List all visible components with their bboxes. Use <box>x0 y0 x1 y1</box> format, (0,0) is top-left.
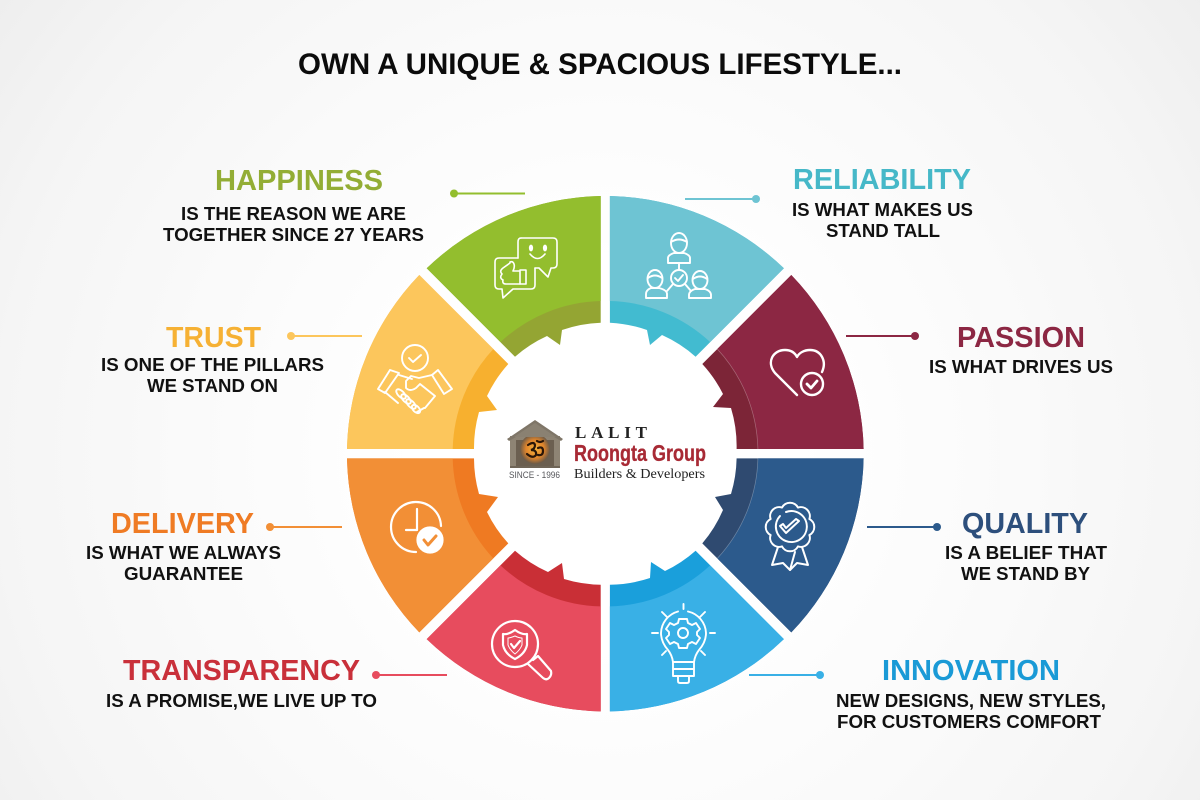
icon: house with om <box>507 420 563 468</box>
callout: quality <box>867 508 1107 584</box>
callout: passion <box>846 322 1113 377</box>
callout: reliability: STAND TALL <box>826 221 940 241</box>
icon: reliability team <box>646 233 711 298</box>
logo name: LALIT <box>575 423 648 442</box>
segment: happiness <box>427 196 601 357</box>
icon: handshake with check <box>378 345 452 415</box>
title: OWN A UNIQUE & SPACIOUS LIFESTYLE... <box>298 48 902 81</box>
since text: SINCE - 1996 <box>509 470 560 481</box>
callout: quality: WE STAND BY <box>961 564 1090 584</box>
callout: trust: WE STAND ON <box>147 376 278 396</box>
logo <box>507 420 706 482</box>
callout: happiness: HAPPINESS <box>215 165 383 197</box>
icon: chat bubbles with smile and thumb <box>495 238 557 298</box>
callout: happiness: IS THE REASON WE ARE <box>181 204 406 224</box>
segment: innovation <box>610 551 784 711</box>
callout: innovation <box>749 655 1106 732</box>
logo group name: Roongta Group <box>574 440 706 466</box>
callout: innovation: NEW DESIGNS, NEW STYLES, <box>836 691 1106 711</box>
callout: transparency: IS A PROMISE,WE LIVE UP TO <box>106 691 377 711</box>
callout: passion: PASSION <box>957 322 1085 354</box>
callout: quality: QUALITY <box>962 508 1088 540</box>
callout: delivery <box>86 508 342 584</box>
callout: happiness: TOGETHER SINCE 27 YEARS <box>163 225 424 245</box>
callout: innovation: INNOVATION <box>882 655 1060 687</box>
segment: passion <box>702 275 864 449</box>
callout: transparency: TRANSPARENCY <box>123 655 360 687</box>
callout: passion: IS WHAT DRIVES US <box>929 357 1113 377</box>
segment: reliability <box>610 196 784 357</box>
icon: light bulb with gear <box>652 604 715 683</box>
icon: magnifier with shield <box>492 621 551 679</box>
callout: trust: TRUST <box>166 322 261 354</box>
icon: quality rosette <box>766 503 814 570</box>
callout: innovation: FOR CUSTOMERS COMFORT <box>837 712 1101 732</box>
icon: heart with check <box>771 350 824 395</box>
callout: reliability: IS WHAT MAKES US <box>792 200 973 220</box>
segment: quality <box>702 458 864 632</box>
callout: delivery: IS WHAT WE ALWAYS <box>86 543 281 563</box>
callout: reliability: RELIABILITY <box>793 164 971 196</box>
icon: clock with check <box>391 502 442 552</box>
callout: quality: IS A BELIEF THAT <box>945 543 1107 563</box>
callout: reliability <box>685 164 973 241</box>
segment: transparency <box>427 551 601 711</box>
callout: delivery: DELIVERY <box>111 508 254 540</box>
callout: transparency <box>106 655 447 711</box>
callout: trust <box>101 322 362 396</box>
callout: trust: IS ONE OF THE PILLARS <box>101 355 324 375</box>
logo tagline: Builders & Developers <box>574 467 705 482</box>
segment: delivery <box>347 458 508 632</box>
segment: trust <box>347 275 508 449</box>
callout: delivery: GUARANTEE <box>124 564 243 584</box>
donut wheel <box>347 196 864 711</box>
callout: happiness <box>163 165 525 245</box>
